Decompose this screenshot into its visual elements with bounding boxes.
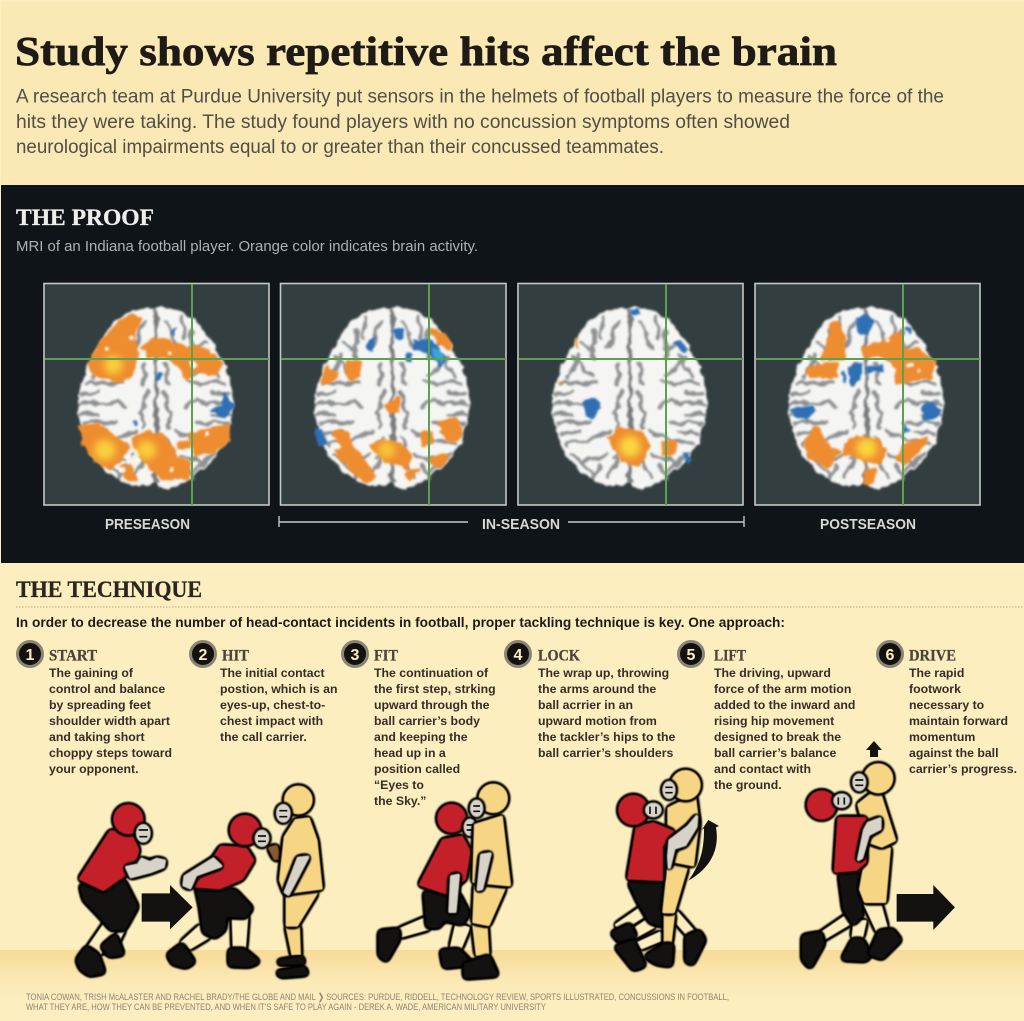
arrow: drive right [897, 885, 955, 930]
step 5: lift: force of the arm motion [714, 682, 851, 696]
step 2: hit: 2 [199, 647, 208, 664]
credits: TONIA COWAN, TRISH McALASTER AND RACHEL BRADY/THE GLOBE AND MAIL ❯ SOURCES: PURDUE, RIDDELL, TECHNOLOGY REVIEW, SPORTS ILLUSTRATED, CONCUSSIONS IN FOOTBALL, [26, 991, 729, 1003]
label: in-season with range line: IN-SEASON [482, 516, 560, 533]
step 3: fit: “Eyes to [374, 778, 424, 792]
step 4: lock: the arms around the [538, 682, 656, 696]
label: preseason: PRESEASON [105, 516, 190, 533]
step 2: hit: postion, which is an [220, 682, 338, 696]
step 6: drive: momentum [909, 730, 975, 744]
heading: the technique: THE TECHNIQUE [16, 577, 202, 602]
step 5: lift [678, 642, 855, 792]
step 4: lock: ball acrrier in an [538, 698, 633, 712]
step 1: start: by spreading feet [49, 698, 151, 712]
panel: the technique [0, 577, 1024, 1012]
step 6: drive: DRIVE [909, 648, 956, 664]
MRI frame 2 [280, 284, 506, 505]
step 3: fit [342, 642, 496, 808]
title: Study shows repetitive hits affect the brain [15, 28, 837, 74]
step 6: drive [878, 642, 1017, 776]
step 2: hit [190, 642, 338, 744]
step 4: lock: The wrap up, throwing [538, 666, 669, 680]
ground band [0, 950, 1024, 1002]
step 4: lock: upward motion from [538, 714, 657, 728]
step 4: lock: 4 [514, 647, 523, 664]
label: in-season with range line [279, 516, 744, 533]
step 5: lift: and contact with [714, 762, 811, 776]
step 3: fit: FIT [374, 648, 398, 664]
step 2: hit: HIT [222, 648, 249, 664]
step 1: start: shoulder width apart [49, 714, 170, 728]
step 5: lift: The driving, upward [714, 666, 831, 680]
step 2: hit: the call carrier. [220, 730, 307, 744]
intro text [16, 86, 944, 158]
arrow: lock lift curve [688, 820, 719, 881]
technique intro: In order to decrease the number of head-contact incidents in football, proper tackling technique is key. One approach: [16, 615, 785, 630]
arrow: up [866, 741, 882, 757]
MRI frame 4 [755, 284, 980, 505]
step 6: drive: The rapid [909, 666, 964, 680]
step 2: hit: eyes-up, chest-to- [220, 698, 325, 712]
top band [1, 2, 1024, 185]
step 2: hit: chest impact with [220, 714, 323, 728]
step 5: lift: designed to break the [714, 730, 841, 744]
step 5: lift: rising hip movement [714, 714, 834, 728]
step 3: fit: the first step, strking [374, 682, 496, 696]
step 1: start: choppy steps toward [49, 746, 172, 760]
step 3: fit: The continuation of [374, 666, 489, 680]
step 5: lift: 5 [687, 647, 696, 664]
MRI frame 3 [518, 284, 743, 505]
step 5: lift: added to the inward and [714, 698, 855, 712]
figure: lock players [613, 772, 703, 968]
figure: start player [78, 806, 164, 974]
step 3: fit: ball carrier’s body [374, 714, 480, 728]
intro text: neurological impairments equal to or greater than their concussed teammates. [16, 137, 664, 158]
step 3: fit: 3 [351, 647, 360, 664]
step 6: drive: footwork [909, 682, 961, 696]
step 6: drive: 6 [886, 647, 895, 664]
step 1: start: START [49, 648, 97, 664]
intro text: hits they were taking. The study found players with no concussion symptoms often showed [16, 112, 790, 133]
MRI frame 1 [44, 284, 269, 505]
caption: MRI of an Indiana football player. Orange color indicates brain activity. [16, 239, 478, 255]
step 3: fit: and keeping the [374, 730, 468, 744]
step 4: lock: the tackler’s hips to the [538, 730, 676, 744]
step 3: fit: head up in a [374, 746, 446, 760]
step 1: start: control and balance [49, 682, 165, 696]
step 5: lift: LIFT [714, 648, 746, 664]
figure: hit players [169, 787, 321, 975]
credits [26, 991, 729, 1012]
intro text: A research team at Purdue University put sensors in the helmets of football players to measure the force of the [16, 86, 944, 108]
step 3: fit: position called [374, 762, 460, 776]
step 1: start: 1 [26, 647, 35, 664]
credits: WHAT THEY ARE, HOW THEY CAN BE PREVENTED, AND WHEN IT’S SAFE TO PLAY AGAIN - DEREK A. WADE, AMERICAN MILITARY UNIVERSITY [26, 1001, 547, 1012]
heading: the proof: THE PROOF [16, 205, 154, 231]
step 5: lift: ball carrier’s balance [714, 746, 837, 760]
label: postseason: POSTSEASON [820, 516, 916, 533]
step 1: start [18, 642, 172, 776]
step 6: drive: necessary to [909, 698, 985, 712]
step 6: drive: carrier’s progress. [909, 762, 1017, 776]
step 1: start: The gaining of [49, 666, 134, 680]
step 5: lift: the ground. [714, 778, 782, 792]
step 1: start: and taking short [49, 730, 145, 744]
step 4: lock [506, 642, 676, 760]
step 3: fit: upward through the [374, 698, 490, 712]
step 3: fit: the Sky.” [374, 794, 426, 808]
step 4: lock: ball carrier’s shoulders [538, 746, 673, 760]
step 6: drive: against the ball [909, 746, 999, 760]
figure: lift players [804, 765, 899, 966]
step 1: start: your opponent. [49, 762, 138, 776]
step 2: hit: The initial contact [220, 666, 325, 680]
panel: the proof [1, 185, 1024, 563]
step 6: drive: maintain forward [909, 714, 1008, 728]
arrow: start to hit [142, 885, 193, 929]
figure: fit players [381, 785, 509, 977]
step 4: lock: LOCK [538, 648, 580, 664]
